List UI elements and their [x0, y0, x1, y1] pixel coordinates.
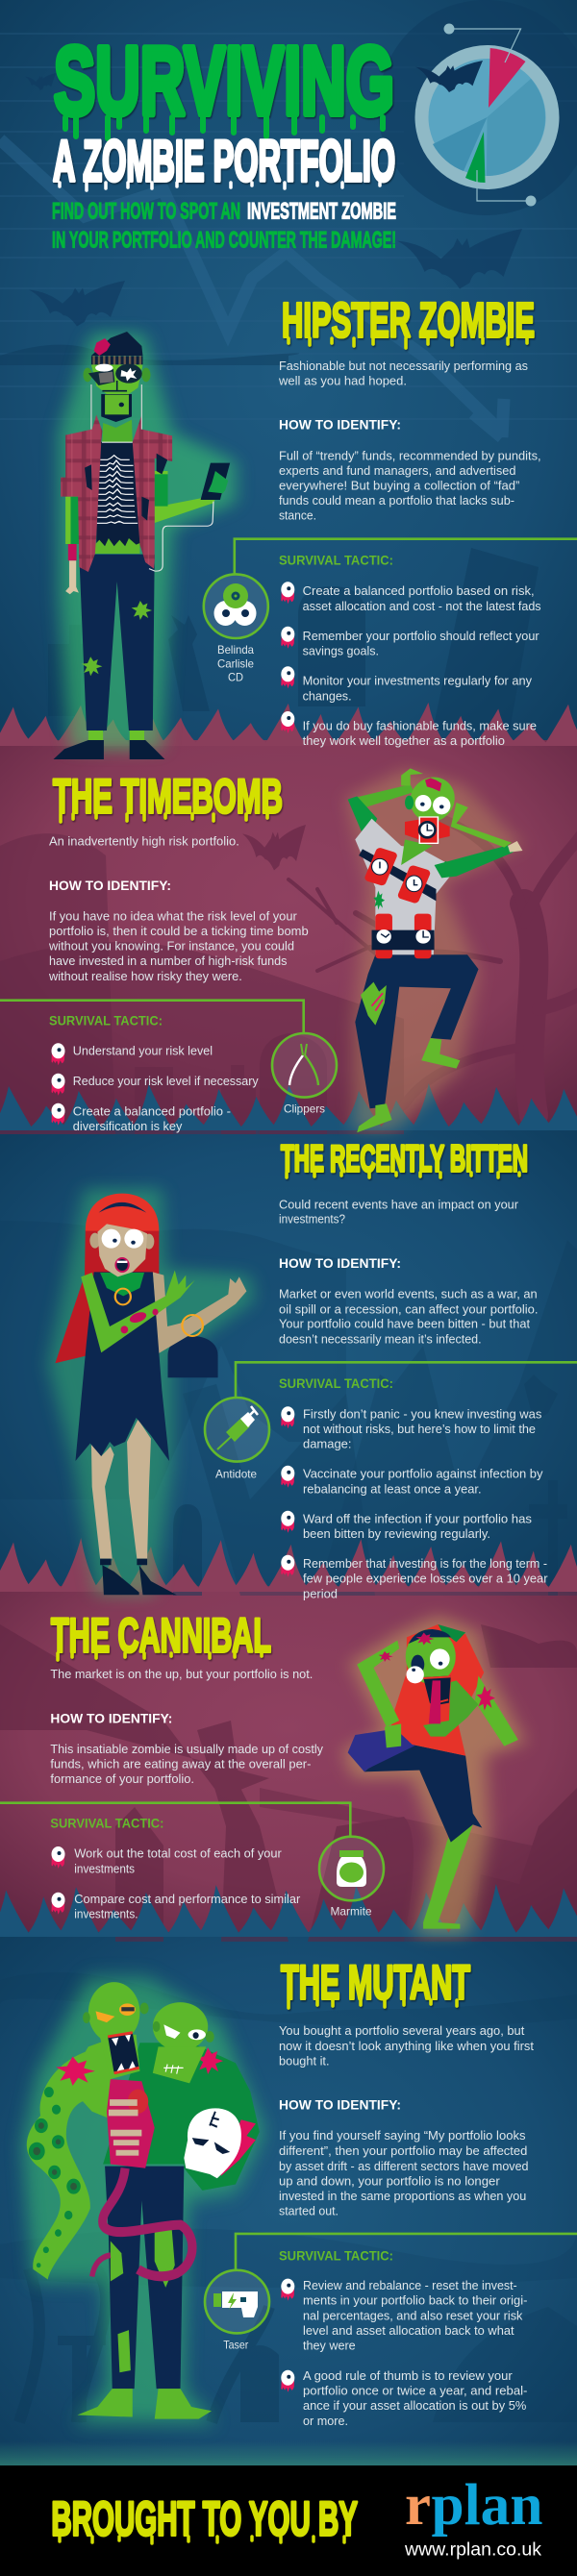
description: the mutant: now it doesn’t look anything like when you first — [279, 2040, 534, 2053]
survival tactic: the mutant: nal percentages, and also reset your risk — [303, 2309, 523, 2322]
label: clippers: Clippers — [284, 1102, 325, 1116]
survival tactic: the recently bitten: Ward off the infection if your portfolio has — [303, 1512, 532, 1525]
rplan logo: r — [405, 2473, 431, 2538]
survival tactic: hipster zombie: Monitor your investments regularly for any — [303, 675, 533, 688]
survival tactic: the cannibal: Compare cost and performance to similar — [74, 1893, 300, 1906]
survival tactic: hipster zombie — [279, 552, 541, 748]
background: bare tree — [288, 812, 577, 1115]
connector line: cannibal tactic — [0, 1803, 350, 1837]
character: the mutant — [22, 1978, 265, 2423]
flame divider: second maroon to blue — [0, 1884, 577, 1937]
survival tactic: the mutant: Review and rebalance - reset the invest- — [303, 2279, 517, 2292]
label: taser: Taser — [223, 2338, 248, 2351]
survival tactic: the timebomb: Create a balanced portfolio - — [73, 1104, 231, 1118]
survival tactic: hipster zombie: SURVIVAL TACTIC: — [279, 552, 393, 567]
title: SURVIVING — [54, 27, 394, 135]
panel: the mutant — [22, 1955, 577, 2428]
how to identify: the timebomb: HOW TO IDENTIFY: — [49, 878, 171, 893]
how to identify: the recently bitten: oil spill or a recession, can affect your portfolio. — [279, 1302, 539, 1316]
heading: the cannibal — [51, 1609, 271, 1663]
survival tactic: the recently bitten: few people experience losses over a 10 year — [303, 1573, 548, 1586]
survival tactic: hipster zombie: Create a balanced portfolio based on risk, — [303, 584, 535, 598]
survival tactic: the cannibal: Work out the total cost of each of your — [74, 1847, 282, 1861]
icon: antidote syringe — [205, 1398, 269, 1462]
how to identify: hipster zombie: stance. — [279, 509, 316, 523]
label: antidote: Antidote — [215, 1467, 257, 1480]
label: Belinda Carlisle CD: CD — [228, 670, 243, 683]
character: the cannibal — [342, 1615, 526, 1935]
how to identify: hipster zombie: everywhere! But buying a collection of “fad” — [279, 479, 519, 492]
rplan logo: plan — [431, 2473, 542, 2538]
survival tactic: the cannibal — [50, 1816, 300, 1920]
panel: the recently bitten — [48, 1138, 577, 1600]
description: the recently bitten: Could recent events have an impact on your — [279, 1198, 518, 1211]
icon: Belinda Carlisle CD — [204, 574, 268, 638]
background: blue silhouettes, first band — [0, 345, 539, 731]
survival tactic: the timebomb: Understand your risk level — [73, 1045, 213, 1058]
survival tactic: the mutant: ments in your portfolio back to their origi- — [303, 2293, 527, 2307]
footer heading: BROUGHT TO YOU BY — [51, 2491, 358, 2545]
survival tactic: the recently bitten: SURVIVAL TACTIC: — [279, 1375, 393, 1391]
how to identify: the cannibal: HOW TO IDENTIFY: — [50, 1710, 172, 1725]
how to identify: hipster zombie: HOW TO IDENTIFY: — [279, 417, 401, 433]
flame divider: blue to maroon — [0, 702, 577, 746]
icon: marmite jar — [319, 1837, 384, 1900]
subtitle — [52, 198, 396, 254]
heading: the timebomb — [53, 769, 283, 823]
bat over pie chart — [415, 61, 483, 92]
survival tactic: the timebomb: diversification is key — [73, 1120, 183, 1133]
label: Belinda Carlisle CD: Belinda — [217, 643, 254, 656]
how to identify: the recently bitten: Market or even world events, such as a war, an — [279, 1288, 538, 1301]
footer bar — [0, 2465, 577, 2576]
heading: the mutant — [281, 1955, 470, 2009]
connector line: bitten tactic — [236, 1362, 577, 1398]
how to identify: the timebomb: If you have no idea what the risk level of your — [49, 909, 297, 923]
label: marmite: Marmite — [331, 1905, 372, 1919]
background: bats — [25, 73, 522, 327]
how to identify: the timebomb: have invested in a number of high-risk funds — [49, 954, 287, 968]
survival tactic: hipster zombie: If you do buy fashionable funds, make sure — [303, 719, 537, 732]
how to identify: the timebomb — [48, 878, 309, 983]
how to identify: hipster zombie: experts and fund managers, and advertised — [279, 464, 515, 478]
label: Belinda Carlisle CD — [217, 643, 254, 683]
description: the recently bitten — [279, 1198, 518, 1226]
how to identify: the cannibal: formance of your portfolio. — [50, 1772, 194, 1786]
survival tactic: the timebomb — [49, 1013, 259, 1133]
character: the recently bitten — [48, 1189, 254, 1596]
survival tactic: the cannibal: investments — [74, 1862, 135, 1875]
background: timebomb band bat — [242, 825, 306, 871]
survival tactic: the recently bitten: rebalancing at least once a year. — [303, 1482, 482, 1496]
survival tactic: the mutant: A good rule of thumb is to review your — [303, 2369, 513, 2383]
background: blue silhouettes, third band — [0, 1972, 577, 2422]
how to identify: the timebomb: portfolio is, then it could be a ticking time bomb — [49, 925, 309, 938]
survival tactic: the mutant: level and asset allocation back to what — [303, 2324, 514, 2338]
survival tactic: the recently bitten: damage: — [303, 1438, 352, 1451]
how to identify: the mutant: invested in the same proportions as when you — [279, 2190, 526, 2203]
panel: hipster zombie — [53, 292, 577, 759]
description: the recently bitten: investments? — [279, 1213, 345, 1226]
description: the mutant: You bought a portfolio several years ago, but — [279, 2024, 525, 2038]
survival tactic: the cannibal: investments. — [74, 1907, 138, 1920]
how to identify: the timebomb: without realise how risky they were. — [48, 970, 242, 983]
icon: taser — [205, 2270, 269, 2333]
description: hipster zombie — [278, 359, 528, 388]
character: the timebomb — [346, 768, 522, 1132]
survival tactic: hipster zombie: changes. — [303, 689, 352, 703]
how to identify: the mutant: HOW TO IDENTIFY: — [279, 2097, 401, 2113]
survival tactic: the mutant: or more. — [303, 2415, 348, 2428]
how to identify: the recently bitten — [279, 1255, 539, 1346]
survival tactic: the timebomb: SURVIVAL TACTIC: — [49, 1013, 163, 1028]
survival tactic: the cannibal: SURVIVAL TACTIC: — [50, 1816, 163, 1831]
description: the cannibal: The market is on the up, but your portfolio is not. — [50, 1668, 313, 1681]
connector line: mutant tactic — [236, 2234, 577, 2270]
how to identify: the cannibal: This insatiable zombie is usually made up of costly — [50, 1743, 324, 1756]
background: falling chart arrows — [0, 139, 504, 437]
how to identify: the timebomb: without you knowing. For instance, you could — [48, 940, 294, 954]
survival tactic: hipster zombie: asset allocation and cost - not the latest fads — [303, 600, 541, 613]
survival tactic: the mutant: ance if your asset allocation is out by 5% — [303, 2399, 526, 2413]
how to identify: the cannibal — [50, 1710, 324, 1786]
survival tactic: the mutant — [279, 2248, 527, 2428]
how to identify: the recently bitten: Your portfolio could have been bitten - but that — [279, 1318, 531, 1331]
survival tactic: the recently bitten: Firstly don’t panic - you knew investing was — [303, 1407, 541, 1421]
survival tactic: the recently bitten: period — [303, 1587, 338, 1600]
survival tactic: hipster zombie: they work well together as a portfolio — [303, 734, 505, 748]
heading: the cannibal: THE CANNIBAL — [51, 1609, 271, 1663]
survival tactic: the recently bitten: Remember that investing is for the long term - — [303, 1557, 547, 1571]
header pie chart — [378, 0, 577, 215]
flame divider: second blue to maroon — [0, 1538, 577, 1592]
survival tactic: the recently bitten: Vaccinate your portfolio against infection by — [303, 1468, 543, 1481]
background: blue silhouettes, second band — [0, 1221, 577, 1596]
how to identify: hipster zombie — [279, 417, 541, 523]
background: maroon silhouettes, first band — [0, 833, 404, 1134]
survival tactic: the mutant: SURVIVAL TACTIC: — [279, 2248, 393, 2264]
subtitle: FIND OUT HOW TO SPOT AN — [52, 198, 240, 225]
how to identify: the mutant: If you find yourself saying “My portfolio looks — [279, 2129, 525, 2143]
subtitle: INVESTMENT ZOMBIE — [247, 198, 396, 225]
description: the mutant — [279, 2024, 534, 2068]
survival tactic: hipster zombie: Remember your portfolio should reflect your — [303, 630, 539, 643]
survival tactic: the recently bitten: not without risks, but here’s how to limit the — [303, 1423, 536, 1436]
how to identify: the mutant — [279, 2097, 529, 2218]
survival tactic: the mutant: portfolio once or twice a year, and rebal- — [303, 2384, 527, 2397]
flame divider: maroon to blue — [0, 1083, 577, 1130]
how to identify: hipster zombie: Full of “trendy” funds, recommended by pundits, — [279, 449, 541, 462]
background: maroon silhouettes, second band — [0, 1624, 577, 1942]
title — [53, 27, 395, 193]
survival tactic: the recently bitten: been bitten by reviewing regularly. — [303, 1527, 490, 1541]
connector line: hipster tactic — [235, 539, 577, 574]
description: hipster zombie: well as you had hoped. — [278, 375, 407, 388]
how to identify: the recently bitten: doesn’t necessarily mean it’s infected. — [279, 1332, 482, 1346]
survival tactic: the recently bitten — [279, 1375, 548, 1600]
how to identify: the cannibal: funds, which are eating away at the overall per- — [50, 1757, 311, 1771]
how to identify: the mutant: different”, then your portfolio may be affected — [279, 2144, 527, 2158]
icon: clippers — [272, 1033, 337, 1098]
heading: the timebomb: THE TIMEBOMB — [53, 769, 283, 823]
description: the mutant: bought it. — [279, 2054, 329, 2068]
label: Belinda Carlisle CD: Carlisle — [217, 656, 254, 670]
survival tactic: the timebomb: Reduce your risk level if necessary — [73, 1075, 259, 1088]
character: hipster zombie — [53, 332, 236, 759]
survival tactic: hipster zombie: savings goals. — [303, 645, 379, 658]
connector line: timebomb tactic — [0, 1001, 304, 1033]
how to identify: the mutant: up and down, your portfolio is no longer — [279, 2174, 500, 2188]
how to identify: the mutant: by asset drift - as different sectors have moved — [279, 2160, 529, 2173]
how to identify: the recently bitten: HOW TO IDENTIFY: — [279, 1255, 401, 1271]
how to identify: hipster zombie: funds could mean a portfolio that lacks sub- — [279, 494, 514, 508]
description: hipster zombie: Fashionable but not necessarily performing as — [279, 359, 528, 373]
panel: the timebomb — [0, 768, 522, 1133]
survival tactic: the mutant: they were — [303, 2340, 356, 2353]
description: the timebomb: An inadvertently high risk portfolio. — [49, 834, 239, 848]
panel: the cannibal — [0, 1609, 526, 1935]
how to identify: the mutant: started out. — [279, 2205, 339, 2218]
website url: www.rplan.co.uk — [404, 2539, 542, 2561]
background: horizontal chart lines — [0, 34, 577, 419]
footer heading — [51, 2491, 358, 2545]
